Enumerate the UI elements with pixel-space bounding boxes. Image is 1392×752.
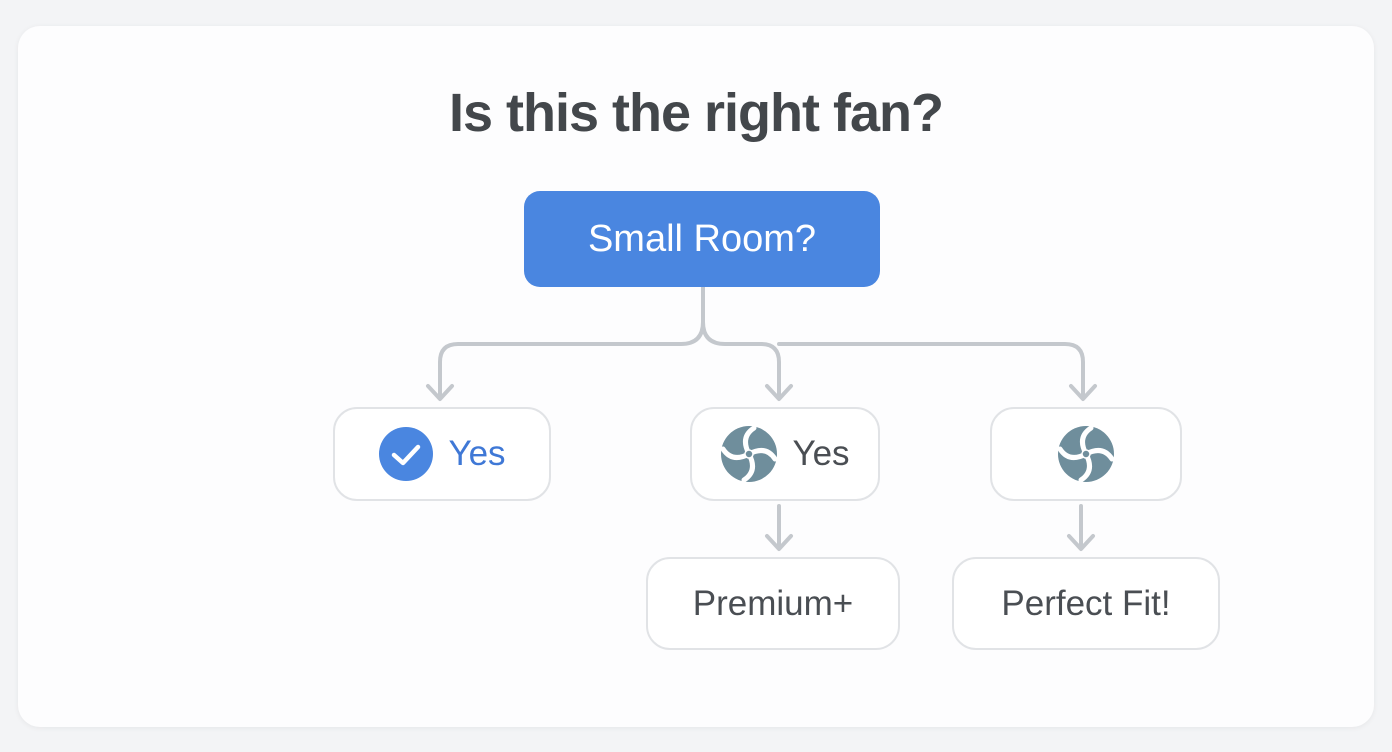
node: yes check: Yes	[448, 434, 506, 473]
node: Perfect Fit!	[952, 557, 1220, 650]
icon: fan	[721, 426, 777, 482]
icon: fan	[1058, 426, 1114, 482]
node: Premium+: Premium+	[693, 584, 853, 622]
root node: Small Room?: Small Room?	[588, 218, 816, 260]
root node: Small Room?	[524, 191, 880, 287]
node: fan yes: Yes	[792, 434, 850, 473]
title: Is this the right fan?	[449, 83, 943, 143]
node: Perfect Fit!: Perfect Fit!	[1001, 584, 1171, 622]
icon: check	[379, 427, 433, 481]
node: Premium+	[646, 557, 900, 650]
node: yes check	[333, 407, 551, 501]
node: fan yes	[690, 407, 880, 501]
node: fan	[990, 407, 1182, 501]
